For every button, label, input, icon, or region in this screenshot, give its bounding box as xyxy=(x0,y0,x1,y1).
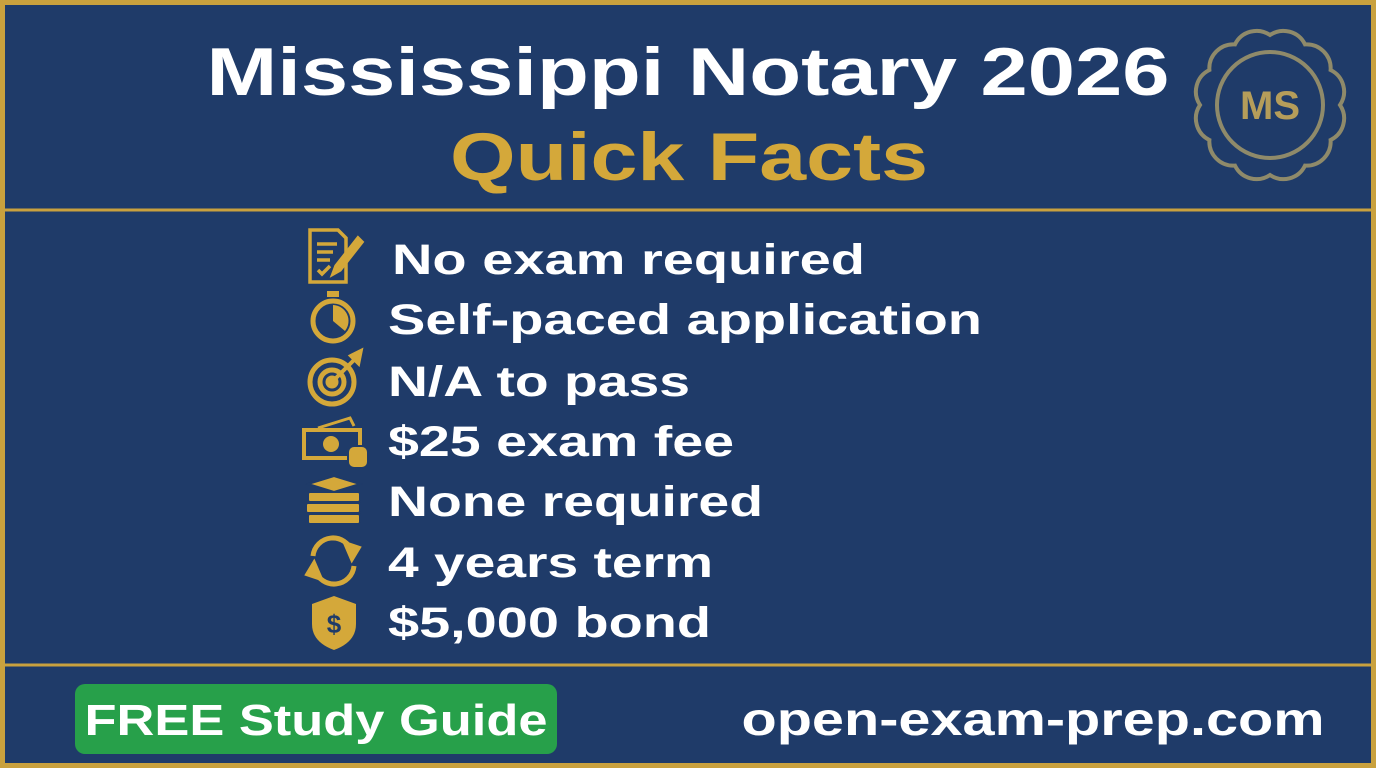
list: quick facts: N/A to pass xyxy=(388,358,690,406)
icon: stopwatch xyxy=(313,291,353,341)
list: quick facts: None required xyxy=(388,478,763,526)
button: FREE Study Guide xyxy=(75,684,557,754)
icon: target xyxy=(310,352,360,404)
website url: open-exam-prep.com xyxy=(742,693,1324,745)
list: quick facts xyxy=(388,236,982,647)
list: quick facts: 4 years term xyxy=(388,539,713,587)
list: quick facts: No exam required xyxy=(392,236,865,284)
list: quick facts: $25 exam fee xyxy=(388,418,734,466)
title: Mississippi Notary 2026 xyxy=(206,34,1170,110)
icon: shield dollar xyxy=(312,596,356,650)
list: quick facts: Self-paced application xyxy=(388,296,982,344)
icon: document with pencil xyxy=(310,230,362,282)
icon: MS seal xyxy=(1196,31,1344,179)
list: quick facts: $5,000 bond xyxy=(388,599,711,647)
title xyxy=(206,34,1170,195)
icon: renew arrows xyxy=(308,538,358,584)
icon: shield dollar: $ xyxy=(327,609,342,639)
title: Quick Facts xyxy=(450,119,928,195)
icon: money and coins xyxy=(304,418,368,468)
icon: books xyxy=(306,476,360,524)
button: FREE Study Guide: FREE Study Guide xyxy=(84,696,548,745)
icon: MS seal: MS xyxy=(1240,84,1300,128)
